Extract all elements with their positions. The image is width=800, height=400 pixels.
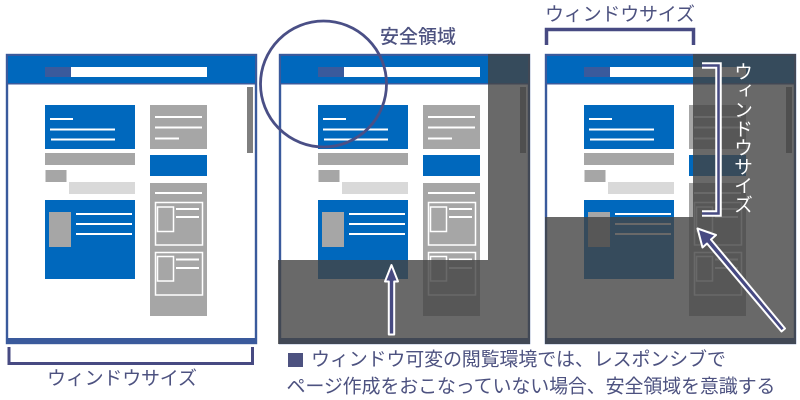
label: window size, vertical: ウィンドウサイズ (731, 62, 752, 214)
scrollbar (247, 87, 253, 153)
window frame (280, 55, 529, 343)
arrow: upward (385, 265, 398, 334)
caption line 2: ページ作成をおこなっていない場合、安全領域を意識する (286, 376, 775, 398)
panel: window with reduced size (545, 54, 796, 344)
scrollbar (520, 87, 526, 153)
label: safe area: 安全領域 (380, 26, 456, 48)
side column (423, 105, 480, 316)
side column (689, 105, 746, 316)
panel: window full size (6, 54, 257, 344)
outside-window dark overlay (545, 54, 796, 344)
caption bullet (288, 353, 303, 367)
bracket: window width, right panel (546, 30, 694, 45)
panel: window with safe area (278, 54, 530, 344)
browser header (279, 54, 530, 84)
outside-safe-area dark overlay (278, 54, 530, 344)
bracket: window width, left panel (9, 347, 252, 364)
main column (584, 105, 674, 279)
caption (286, 348, 775, 398)
caption line 1: ウィンドウ可変の閲覧環境では、レスポンシブで (311, 348, 726, 370)
arrow: diagonal (698, 228, 785, 332)
label: window size, left panel: ウィンドウサイズ (47, 368, 197, 390)
main column (318, 105, 408, 279)
scrollbar (786, 87, 792, 153)
window frame (546, 55, 795, 343)
bracket: window height, right panel (702, 66, 718, 214)
side column (150, 105, 207, 316)
icon: safe area circle (260, 21, 386, 147)
main column (45, 105, 135, 279)
label: window size, right panel: ウィンドウサイズ (545, 4, 695, 26)
browser header (545, 54, 796, 84)
window frame (7, 55, 256, 343)
browser header (6, 54, 257, 84)
